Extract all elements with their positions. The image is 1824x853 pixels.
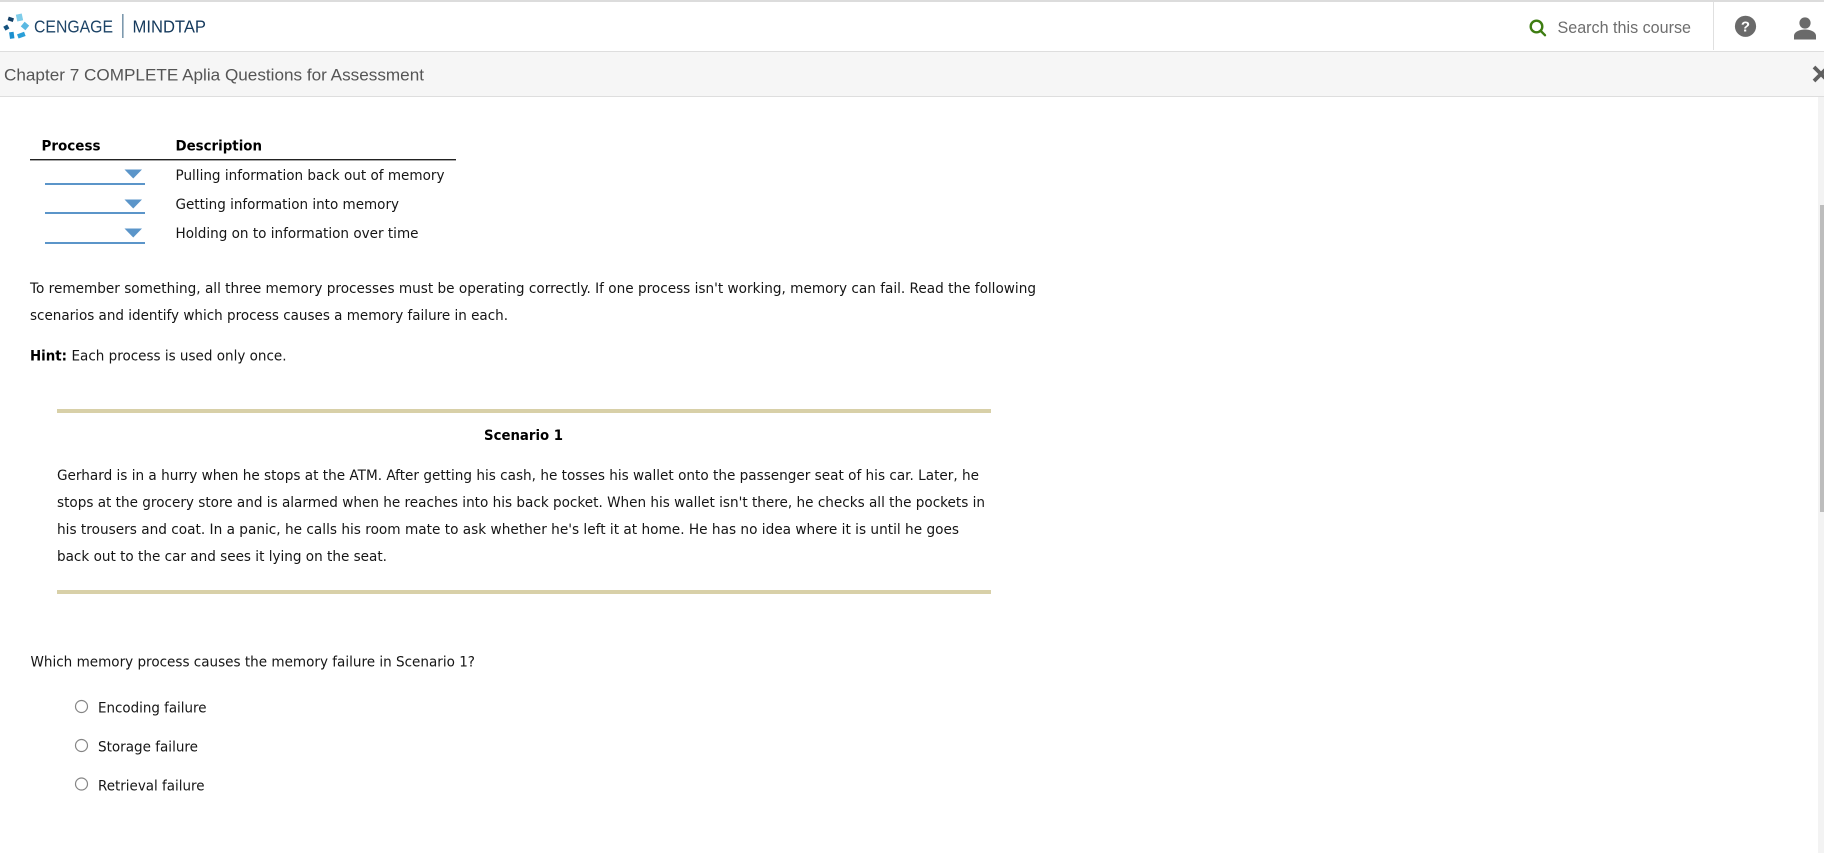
icon: help (1735, 16, 1756, 37)
logo text: MINDTAP: MINDTAP (132, 16, 206, 36)
column heading: Description: Description (176, 138, 262, 154)
option: encoding failure: Encoding failure (98, 700, 206, 716)
option: storage failure: Storage failure (98, 740, 198, 756)
scenario text: Gerhard is in a hurry when he stops at the ATM. After getting his cash, he tosses his wallet onto the passenger seat of his car. Later, he (57, 468, 979, 484)
logo text: CENGAGE: CENGAGE (34, 16, 113, 36)
row 1: Pulling information back out of memory (176, 168, 444, 184)
assignment title: Chapter 7 COMPLETE Aplia Questions for Assessment (4, 66, 424, 84)
search label: Search this course (1558, 19, 1691, 37)
icon: search (1531, 21, 1545, 35)
icon: Cengage logo mark (3, 13, 29, 39)
scenario heading: Scenario 1 (484, 428, 563, 444)
scenario text (57, 468, 985, 565)
hint: Each process is used only once. (72, 348, 286, 364)
question: Which memory process causes the memory failure in Scenario 1? (30, 654, 475, 670)
instructions paragraph: To remember something, all three memory processes must be operating correctly. If one process isn't working, memory can fail. Read the following (29, 281, 1036, 297)
instructions paragraph (29, 281, 1036, 324)
process table (30, 138, 456, 244)
panel: scenario 1 (57, 409, 991, 594)
icon: help: ? (1741, 18, 1750, 36)
scenario text: back out to the car and sees it lying on the seat. (57, 549, 387, 565)
assignment title bar (0, 52, 1824, 97)
row 3: Holding on to information over time (176, 226, 418, 242)
answer options (76, 700, 206, 794)
row 3 (45, 226, 418, 244)
row 2: Getting information into memory (176, 197, 399, 213)
icon: user (1794, 17, 1816, 40)
row 1 (45, 168, 444, 185)
column heading: Process: Process (42, 138, 100, 154)
row 2 (45, 197, 399, 214)
option: retrieval failure: Retrieval failure (98, 778, 204, 794)
scenario text: stops at the grocery store and is alarmed when he reaches into his back pocket. When his wallet isn't there, he checks all the pockets in (57, 495, 985, 511)
icon: close (1814, 67, 1824, 81)
scrollbar (1818, 97, 1824, 853)
scenario text: his trousers and coat. In a panic, he calls his room mate to ask whether he's left it at home. He has no idea where it is until he goes (57, 522, 959, 538)
instructions paragraph: scenarios and identify which process causes a memory failure in each. (30, 308, 508, 324)
top navigation bar (0, 0, 1824, 52)
hint: Hint: (30, 348, 67, 364)
